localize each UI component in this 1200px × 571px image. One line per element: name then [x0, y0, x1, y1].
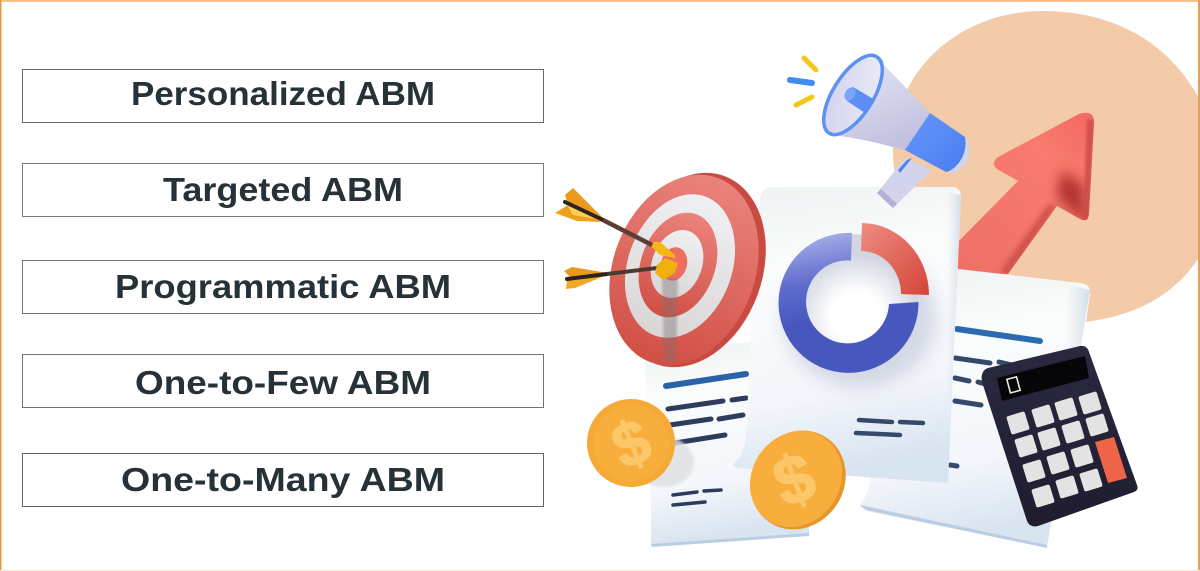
icon: coin right: $ — [764, 438, 825, 522]
icon: megaphone — [790, 46, 969, 208]
icon: target with arrows — [555, 151, 792, 389]
icon: coin right — [731, 412, 865, 548]
illustration: marketing collage — [555, 11, 1200, 548]
document: right — [860, 269, 1090, 548]
donut: red segment — [861, 223, 929, 295]
box: One-to-Many ABM — [22, 454, 544, 506]
calculator red key — [1095, 437, 1127, 483]
box: Personalized ABM: Personalized ABM — [131, 75, 435, 112]
calculator keys — [1006, 391, 1109, 508]
donut: blue segment — [779, 233, 919, 373]
target board — [584, 151, 792, 389]
arrow: upper — [555, 188, 675, 258]
document: left — [644, 340, 809, 547]
megaphone cone — [840, 64, 930, 151]
text lines on centre document — [856, 420, 923, 435]
box: One-to-Many ABM: One-to-Many ABM — [121, 461, 445, 498]
box: Targeted ABM — [22, 164, 544, 216]
list of ABM types — [22, 70, 544, 506]
calculator display — [997, 356, 1089, 401]
donut chart — [779, 223, 936, 388]
megaphone mouth — [812, 46, 894, 144]
text lines on right document — [950, 329, 1040, 466]
megaphone sparks — [790, 58, 816, 105]
box: One-to-Few ABM — [22, 354, 544, 408]
box: Programmatic ABM — [22, 260, 544, 314]
box: Personalized ABM — [22, 70, 544, 122]
document: centre — [733, 187, 961, 483]
box: One-to-Few ABM: One-to-Few ABM — [135, 364, 431, 401]
box: Targeted ABM: Targeted ABM — [163, 171, 403, 208]
peach background circle — [893, 11, 1200, 323]
megaphone blue collar — [905, 113, 969, 173]
icon: red growth arrow — [955, 113, 1094, 276]
icon: coin left — [587, 399, 694, 487]
megaphone handle — [877, 158, 932, 208]
icon: coin left: $ — [603, 406, 660, 483]
box: Programmatic ABM: Programmatic ABM — [115, 268, 451, 305]
calculator digit — [1007, 377, 1020, 393]
text lines on left document — [666, 374, 746, 505]
arrow: lower — [564, 258, 678, 289]
icon: calculator — [982, 346, 1138, 526]
